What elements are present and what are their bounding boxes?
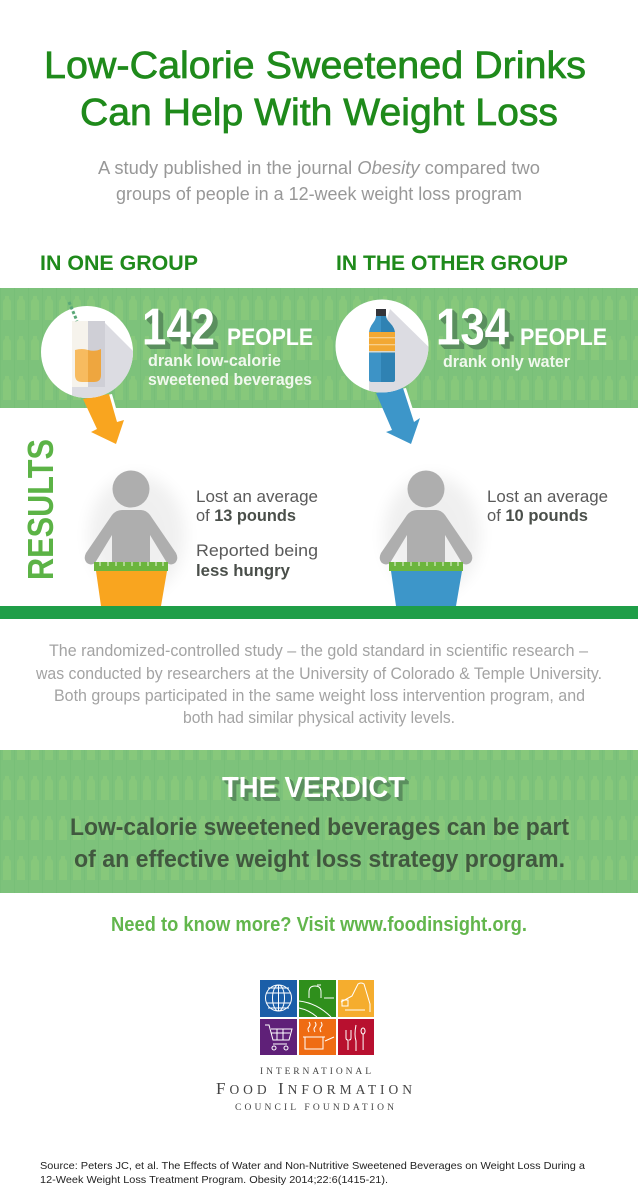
stat: 142 people: sweetened beverages bbox=[148, 371, 312, 389]
heading: the verdict: THE VERDICT bbox=[226, 776, 409, 808]
heading: results: RESULTS bbox=[20, 439, 61, 580]
text: study description: Both groups participated in the same weight loss intervention program, and bbox=[54, 687, 585, 705]
figure: person with orange waistband bbox=[85, 470, 185, 606]
stat: 142 people: drank low-calorie bbox=[148, 352, 281, 370]
text: group one results: less hungry bbox=[196, 561, 291, 580]
subtitle bbox=[98, 157, 540, 204]
text: call to action: Need to know more? Visit www.foodinsight.org. bbox=[111, 914, 527, 936]
stat: 134 people: 134 bbox=[436, 298, 509, 356]
text: source: Source: Peters JC, et al. The Effects of Water and Non-Nutritive Sweetened Beverages on Weight Loss During a bbox=[40, 1160, 585, 1172]
logo: wordmark: F OOD I NFORMATION bbox=[216, 1079, 412, 1098]
text: verdict statement: of an effective weight loss strategy program. bbox=[74, 846, 565, 873]
text: study description: both had similar physical activity levels. bbox=[183, 709, 455, 727]
heading: in one group: IN ONE GROUP bbox=[40, 252, 198, 275]
title: Can Help With Weight Loss bbox=[80, 92, 558, 134]
subtitle: A study published in the journal Obesity compared two bbox=[98, 157, 540, 178]
stat: 142 people: 142 bbox=[145, 301, 218, 359]
heading: in the other group: IN THE OTHER GROUP bbox=[336, 252, 568, 275]
text: group one results: Reported being bbox=[196, 541, 318, 560]
logo: wordmark: INTERNATIONAL bbox=[260, 1067, 371, 1077]
divider bar bbox=[0, 606, 638, 619]
title: Low-Calorie Sweetened Drinks bbox=[44, 45, 586, 87]
text: group two results: of 10 pounds bbox=[487, 506, 588, 525]
panel: groups band bbox=[0, 288, 638, 408]
text: study description: was conducted by researchers at the University of Colorado & Temple University. bbox=[35, 665, 602, 683]
title bbox=[44, 45, 586, 134]
logo: tiles bbox=[260, 980, 374, 1055]
panel: the verdict bbox=[0, 750, 638, 893]
text: group two results bbox=[487, 487, 608, 525]
text: group two results: Lost an average bbox=[487, 487, 608, 506]
stat: 142 people bbox=[142, 298, 313, 389]
heading: the verdict: THE VERDICT bbox=[222, 772, 405, 804]
text: group one results: Lost an average bbox=[196, 487, 318, 506]
stat: 134 people bbox=[436, 298, 607, 371]
stat: 142 people: 142 bbox=[147, 303, 220, 361]
text: verdict statement bbox=[70, 814, 569, 873]
arrow: blue bbox=[376, 388, 422, 446]
stat: 134 people: 134 bbox=[438, 300, 511, 358]
figure: person with blue waistband bbox=[380, 470, 480, 606]
stat: 134 people: 134 bbox=[441, 303, 514, 361]
arrow: orange bbox=[83, 394, 126, 446]
logo: wordmark bbox=[216, 1067, 412, 1113]
text: study description: The randomized-controlled study – the gold standard in scientific research – bbox=[49, 642, 589, 660]
stat: 142 people: 142 bbox=[146, 302, 219, 360]
stat: 134 people: 134 bbox=[439, 301, 512, 359]
icon: glass in circle bbox=[41, 302, 133, 398]
text: group one results: of 13 pounds bbox=[196, 506, 296, 525]
stat: 134 people: PEOPLE bbox=[520, 324, 607, 351]
text: source bbox=[40, 1160, 585, 1186]
logo: wordmark: COUNCIL FOUNDATION bbox=[235, 1103, 394, 1113]
stat: 142 people: PEOPLE bbox=[227, 324, 313, 351]
text: verdict statement: Low-calorie sweetened beverages can be part bbox=[70, 814, 569, 841]
stat: 134 people: 134 bbox=[440, 302, 513, 360]
heading: the verdict: THE VERDICT bbox=[225, 775, 408, 807]
heading: the verdict: THE VERDICT bbox=[224, 774, 407, 806]
text: source: 12-Week Weight Loss Treatment Program. Obesity 2014;22:6(1415-21). bbox=[40, 1174, 388, 1186]
stat: 142 people: 142 bbox=[144, 300, 217, 358]
text: study description bbox=[35, 642, 602, 727]
text: group one results bbox=[196, 487, 318, 580]
subtitle: groups of people in a 12-week weight loss program bbox=[116, 183, 522, 204]
stat: 134 people: drank only water bbox=[443, 353, 571, 371]
icon: bottle in circle bbox=[336, 300, 428, 392]
stat: 142 people: 142 bbox=[142, 298, 215, 356]
